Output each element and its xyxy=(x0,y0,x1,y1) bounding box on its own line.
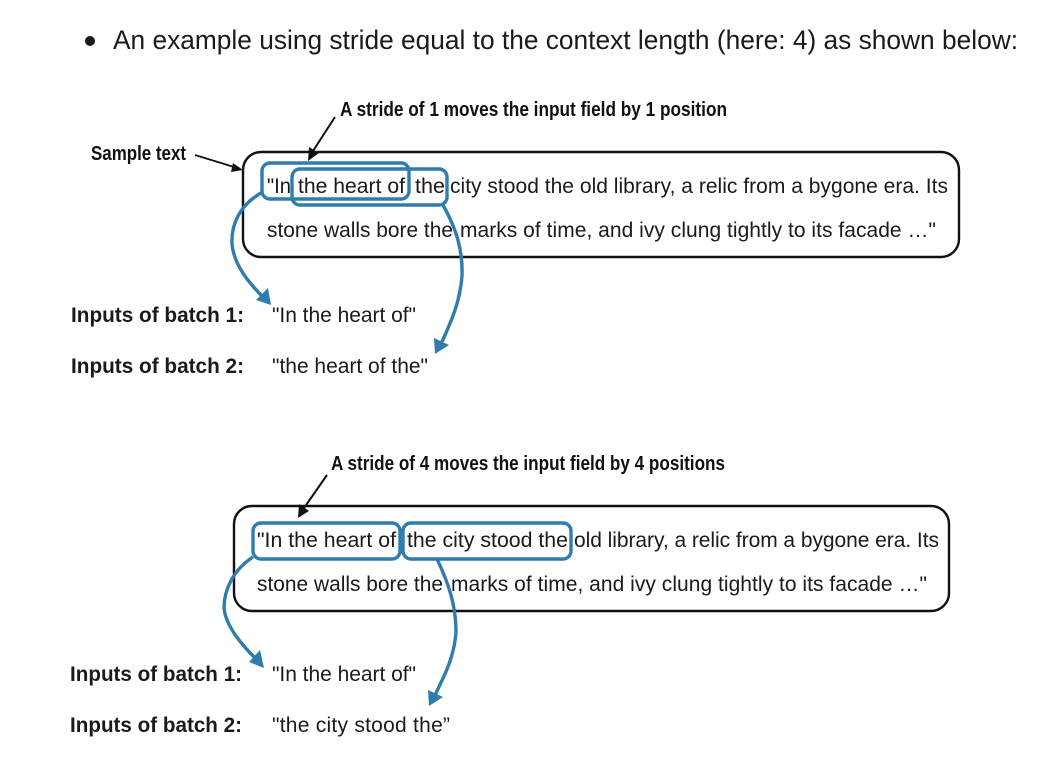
panel: stride of 4 xyxy=(70,453,949,737)
sample text lines: city stood the old library, a relic from a bygone era. Its xyxy=(450,175,948,198)
batch 2 value: "the city stood the” xyxy=(272,714,450,737)
sample text lines: the xyxy=(415,175,445,198)
sample text lines: stone walls bore the xyxy=(257,573,443,596)
callout: stride of 1: A stride of 1 moves the input field by 1 position xyxy=(340,99,727,121)
sample text lines: marks of time, and ivy clung tightly to its facade …" xyxy=(460,219,936,242)
arrow: to batch 2 xyxy=(434,205,462,354)
arrow: stride of 4 callout xyxy=(298,475,327,518)
sample text lines: stone walls bore the xyxy=(267,219,453,242)
batch 2 label: Inputs of batch 2: xyxy=(71,354,244,378)
label: sample text: Sample text xyxy=(91,143,186,165)
arrow: stride of 1 callout xyxy=(308,117,335,161)
sample text lines xyxy=(257,529,939,596)
sample text lines: "In xyxy=(267,175,291,198)
batch 1 label: Inputs of batch 1: xyxy=(71,303,244,327)
bullet heading: An example using stride equal to the context length (here: 4) as shown below: xyxy=(113,25,1018,55)
batch 1 value: "In the heart of" xyxy=(272,663,416,686)
window: batch 2 xyxy=(403,523,571,559)
batch 1 label: Inputs of batch 1: xyxy=(70,662,242,686)
panel: stride of 1 xyxy=(71,99,959,378)
sample text lines: the heart of xyxy=(298,175,405,198)
batch 1 value: "In the heart of" xyxy=(272,304,416,327)
callout: stride of 4: A stride of 4 moves the input field by 4 positions xyxy=(331,453,725,475)
sample text lines: the city stood the xyxy=(407,529,568,552)
arrow: to batch 1 xyxy=(232,193,271,305)
sample text box xyxy=(234,506,949,611)
window: batch 2 xyxy=(292,169,447,205)
arrow: sample text xyxy=(195,155,243,172)
window: batch 1 xyxy=(262,163,409,199)
arrow: to batch 1 xyxy=(224,557,264,668)
arrow: to batch 2 xyxy=(428,559,456,706)
window: batch 1 xyxy=(253,523,400,559)
sample text lines xyxy=(267,175,948,242)
batch 2 label: Inputs of batch 2: xyxy=(70,713,242,737)
sample text lines: old library, a relic from a bygone era. Its xyxy=(574,529,939,552)
sample text lines: marks of time, and ivy clung tightly to its facade …" xyxy=(451,573,927,596)
sample text box xyxy=(243,152,959,257)
sample text lines: "In the heart of xyxy=(257,529,396,552)
batch 2 value: "the heart of the" xyxy=(272,355,428,378)
